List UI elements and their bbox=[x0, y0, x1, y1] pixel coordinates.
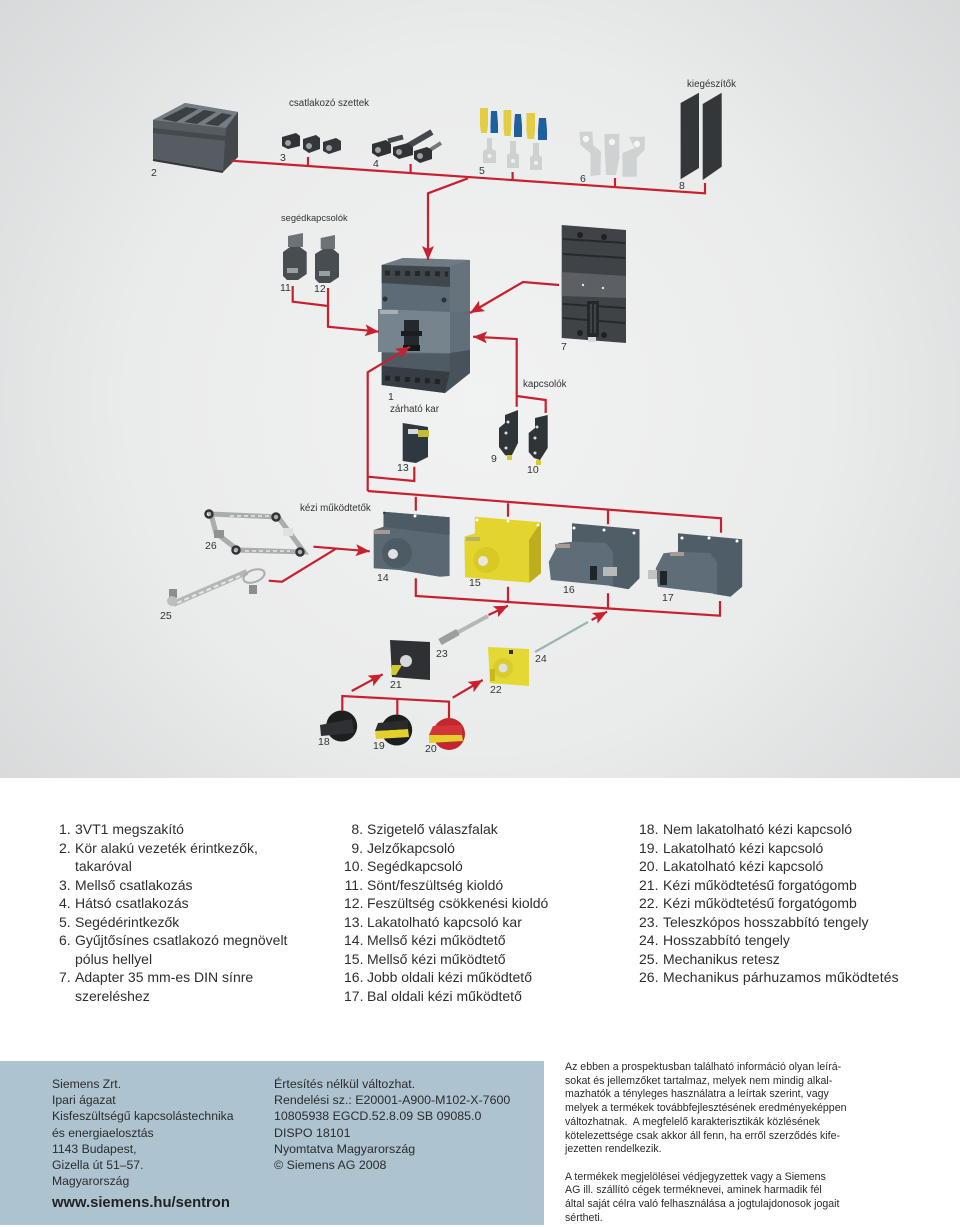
icon: 26 parallel mechanism bbox=[206, 510, 304, 556]
legend column 2: Bal oldali kézi működtető bbox=[367, 988, 522, 1004]
icon: 24 extension shaft bbox=[535, 622, 588, 652]
label 5: 5 bbox=[479, 165, 485, 177]
label 9: 9 bbox=[491, 453, 497, 465]
icon: 1 circuit breaker bbox=[378, 258, 470, 393]
icon: 22 yellow door-coupling knob bbox=[488, 647, 529, 686]
address block: Magyarország bbox=[52, 1174, 129, 1188]
legend column 2: 17. bbox=[344, 988, 363, 1004]
legend column 2: 9. bbox=[351, 840, 363, 856]
legend column 2: 12. bbox=[344, 895, 363, 911]
legal disclaimer bbox=[564, 1061, 846, 1224]
legend column 3 bbox=[639, 821, 899, 985]
icon: 15 yellow front operator bbox=[464, 517, 541, 583]
address block: 1143 Budapest, bbox=[52, 1142, 136, 1156]
legend column 3: 19. bbox=[639, 840, 658, 856]
legend column 2: Szigetelő válaszfalak bbox=[367, 821, 498, 837]
order information block bbox=[274, 1077, 510, 1172]
icon: 18 black handle bbox=[320, 710, 357, 742]
icon: 19 black handle with yellow bbox=[375, 714, 412, 746]
legend column 3: Lakatolható kézi kapcsoló bbox=[663, 858, 823, 874]
legend column 3: Hosszabbító tengely bbox=[663, 932, 790, 948]
icon: 7 DIN rail adapter bbox=[562, 225, 626, 343]
icon: 5 connectors and lugs bbox=[480, 108, 547, 170]
group label: kézi működtetők: kézi működtetők bbox=[300, 503, 371, 514]
legend column 2: 8. bbox=[351, 821, 363, 837]
legend column 2: Segédkapcsoló bbox=[367, 858, 463, 874]
legend column 2: Sönt/feszültség kioldó bbox=[367, 877, 503, 893]
label 19: 19 bbox=[373, 740, 385, 752]
order information block: DISPO 18101 bbox=[274, 1126, 350, 1140]
icon: 3 front terminals bbox=[282, 133, 341, 154]
legend column 1: Segédérintkezők bbox=[75, 914, 179, 930]
address block: Siemens Zrt. bbox=[52, 1077, 121, 1091]
legal disclaimer: mazhatók a tényleges használatra a leírtak szerint, vagy bbox=[565, 1088, 829, 1100]
legend column 2: Mellső kézi működtető bbox=[367, 951, 506, 967]
label 22: 22 bbox=[490, 684, 502, 696]
icon: 21 black door-coupling knob bbox=[390, 640, 430, 680]
footer band bbox=[0, 1061, 544, 1225]
legal disclaimer: melyek a termékek továbbfejlesztésének eredményeképpen bbox=[565, 1102, 846, 1114]
icon: 4 rear terminals bbox=[372, 132, 441, 163]
legal disclaimer: AG ill. szállító cégek terméknevei, aminek harmadik fél bbox=[565, 1184, 822, 1196]
legend column 1: 6. bbox=[59, 932, 71, 948]
exploded product diagram bbox=[0, 0, 960, 778]
legend column 3: 24. bbox=[639, 932, 658, 948]
order information block: Rendelési sz.: E20001-A900-M102-X-7600 bbox=[274, 1093, 510, 1107]
legend column 1 bbox=[59, 821, 288, 1004]
icon: 23 telescopic shaft bbox=[440, 616, 488, 642]
label 3: 3 bbox=[280, 152, 286, 164]
legend column 3: Nem lakatolható kézi kapcsoló bbox=[663, 821, 852, 837]
address block bbox=[52, 1077, 234, 1188]
label 21: 21 bbox=[390, 679, 402, 691]
legend column 1: szereléshez bbox=[75, 988, 150, 1004]
icon: 6 busbar connectors bbox=[579, 132, 645, 177]
icon: 8 phase barriers bbox=[681, 93, 722, 180]
legend column 1: 7. bbox=[59, 969, 71, 985]
legend column 2: 10. bbox=[344, 858, 363, 874]
order information block: © Siemens AG 2008 bbox=[274, 1158, 386, 1172]
legend column 2: Mellső kézi működtető bbox=[367, 932, 506, 948]
legend column 1: Kör alakú vezeték érintkezők, bbox=[75, 840, 258, 856]
icon: 25 mechanical interlock bbox=[167, 567, 266, 606]
legend column 1: Mellső csatlakozás bbox=[75, 877, 192, 893]
legend column 2: Lakatolható kapcsoló kar bbox=[367, 914, 522, 930]
order information block: Értesítés nélkül változhat. bbox=[274, 1077, 415, 1091]
legal disclaimer: sokat és jellemzőket tartalmaz, melyek nem mindig alkal- bbox=[565, 1075, 832, 1087]
legend column 1: 3. bbox=[59, 877, 71, 893]
address block: Gizella út 51–57. bbox=[52, 1158, 143, 1172]
label 14: 14 bbox=[377, 572, 389, 584]
legend column 2: 13. bbox=[344, 914, 363, 930]
label 8: 8 bbox=[679, 180, 685, 192]
legend column 2 bbox=[344, 821, 548, 1004]
legal disclaimer: Az ebben a prospektusban található információ olyan leírá- bbox=[565, 1061, 841, 1073]
legend column 1: 2. bbox=[59, 840, 71, 856]
legend column 1: 1. bbox=[59, 821, 71, 837]
address block: Ipari ágazat bbox=[52, 1093, 116, 1107]
label 20: 20 bbox=[425, 743, 437, 755]
website link text: www.siemens.hu/sentron bbox=[52, 1195, 230, 1211]
address block: Kisfeszültségű kapcsolástechnika bbox=[52, 1109, 234, 1123]
legend column 3: 22. bbox=[639, 895, 658, 911]
label 13: 13 bbox=[397, 462, 409, 474]
red connector lines bbox=[231, 157, 721, 718]
order information block: 10805938 EGCD.52.8.09 SB 09085.0 bbox=[274, 1109, 481, 1123]
group label: csatlakozó szettek: csatlakozó szettek bbox=[289, 98, 369, 109]
legend column 3: Kézi működtetésű forgatógomb bbox=[663, 895, 857, 911]
icon: 14 front rotary operator bbox=[374, 512, 450, 577]
icon: 12 auxiliary release bbox=[315, 235, 339, 283]
icon: 20 red handle with yellow bbox=[429, 718, 465, 750]
legal disclaimer: kötelezettsége csak akkor áll fenn, ha erről szerződés kife- bbox=[565, 1130, 840, 1142]
legend column 3: 25. bbox=[639, 951, 658, 967]
legend column 1: 3VT1 megszakító bbox=[75, 821, 184, 837]
label 11: 11 bbox=[280, 282, 291, 294]
legend column 3: 26. bbox=[639, 969, 658, 985]
legal disclaimer: A termékek megjelölései védjegyzettek vagy a Siemens bbox=[565, 1171, 826, 1183]
legend column 2: Jobb oldali kézi működtető bbox=[367, 969, 532, 985]
legal disclaimer: által saját célra való felhasználása a jogtulajdonosok jogait bbox=[565, 1198, 839, 1210]
icon: 2 terminal cover bbox=[153, 103, 238, 172]
legend column 2: 11. bbox=[345, 877, 363, 893]
legend column 2: 16. bbox=[344, 969, 363, 985]
legend column 1: Gyűjtősínes csatlakozó megnövelt bbox=[75, 932, 287, 948]
legal disclaimer: sértheti. bbox=[565, 1212, 603, 1224]
label 23: 23 bbox=[436, 648, 448, 660]
legend column 2: 14. bbox=[344, 932, 363, 948]
legal disclaimer: változhatnak. A megfelelő karakterisztikák közlésének bbox=[565, 1116, 820, 1128]
group label: segédkapcsolók: segédkapcsolók bbox=[281, 213, 348, 223]
legend column 1: 5. bbox=[59, 914, 71, 930]
legend column 1: 4. bbox=[59, 895, 71, 911]
group label: zárható kar: zárható kar bbox=[390, 404, 440, 415]
legal disclaimer: jezetten rendelkezik. bbox=[565, 1143, 662, 1155]
legend column 1: Hátsó csatlakozás bbox=[75, 895, 189, 911]
label 15: 15 bbox=[469, 577, 481, 589]
label 2: 2 bbox=[151, 167, 157, 179]
icon: 10 auxiliary switch bbox=[529, 415, 548, 465]
icon: 11 auxiliary release bbox=[283, 233, 307, 280]
label 16: 16 bbox=[563, 584, 575, 596]
icon: 13 lockable lever bbox=[403, 423, 429, 463]
label 4: 4 bbox=[373, 158, 379, 170]
legend column 2: Feszültség csökkenési kioldó bbox=[367, 895, 548, 911]
label 26: 26 bbox=[205, 540, 217, 552]
legend column 3: 21. bbox=[639, 877, 658, 893]
order information block: Nyomtatva Magyarország bbox=[274, 1142, 415, 1156]
legend column 1: pólus hellyel bbox=[75, 951, 152, 967]
legend column 2: Jelzőkapcsoló bbox=[367, 840, 455, 856]
label 6: 6 bbox=[580, 173, 586, 185]
group label: kiegészítők: kiegészítők bbox=[687, 79, 736, 90]
label 12: 12 bbox=[314, 283, 326, 295]
label 17: 17 bbox=[662, 592, 674, 604]
legend column 3: Kézi működtetésű forgatógomb bbox=[663, 877, 857, 893]
label 24: 24 bbox=[535, 653, 547, 665]
legend column 2: 15. bbox=[344, 951, 363, 967]
legend column 3: 18. bbox=[639, 821, 658, 837]
icon: 16 right side operator bbox=[549, 523, 640, 589]
address block: és energiaelosztás bbox=[52, 1126, 154, 1140]
icon: 17 left side operator bbox=[648, 533, 742, 597]
label 18: 18 bbox=[318, 736, 330, 748]
legend column 3: Mechanikus retesz bbox=[663, 951, 780, 967]
legend column 3: Mechanikus párhuzamos működtetés bbox=[663, 969, 899, 985]
label 10: 10 bbox=[527, 464, 539, 476]
group label: kapcsolók: kapcsolók bbox=[523, 379, 567, 390]
legend column 3: 20. bbox=[639, 858, 658, 874]
legend column 3: 23. bbox=[639, 914, 658, 930]
label 7: 7 bbox=[561, 341, 567, 353]
label 1: 1 bbox=[388, 391, 394, 403]
icon: 9 auxiliary switch bbox=[499, 410, 518, 460]
legend column 1: Adapter 35 mm-es DIN sínre bbox=[75, 969, 253, 985]
legend column 1: takaróval bbox=[75, 858, 132, 874]
legend column 3: Lakatolható kézi kapcsoló bbox=[663, 840, 823, 856]
legend column 3: Teleszkópos hosszabbító tengely bbox=[663, 914, 868, 930]
label 25: 25 bbox=[160, 610, 172, 622]
